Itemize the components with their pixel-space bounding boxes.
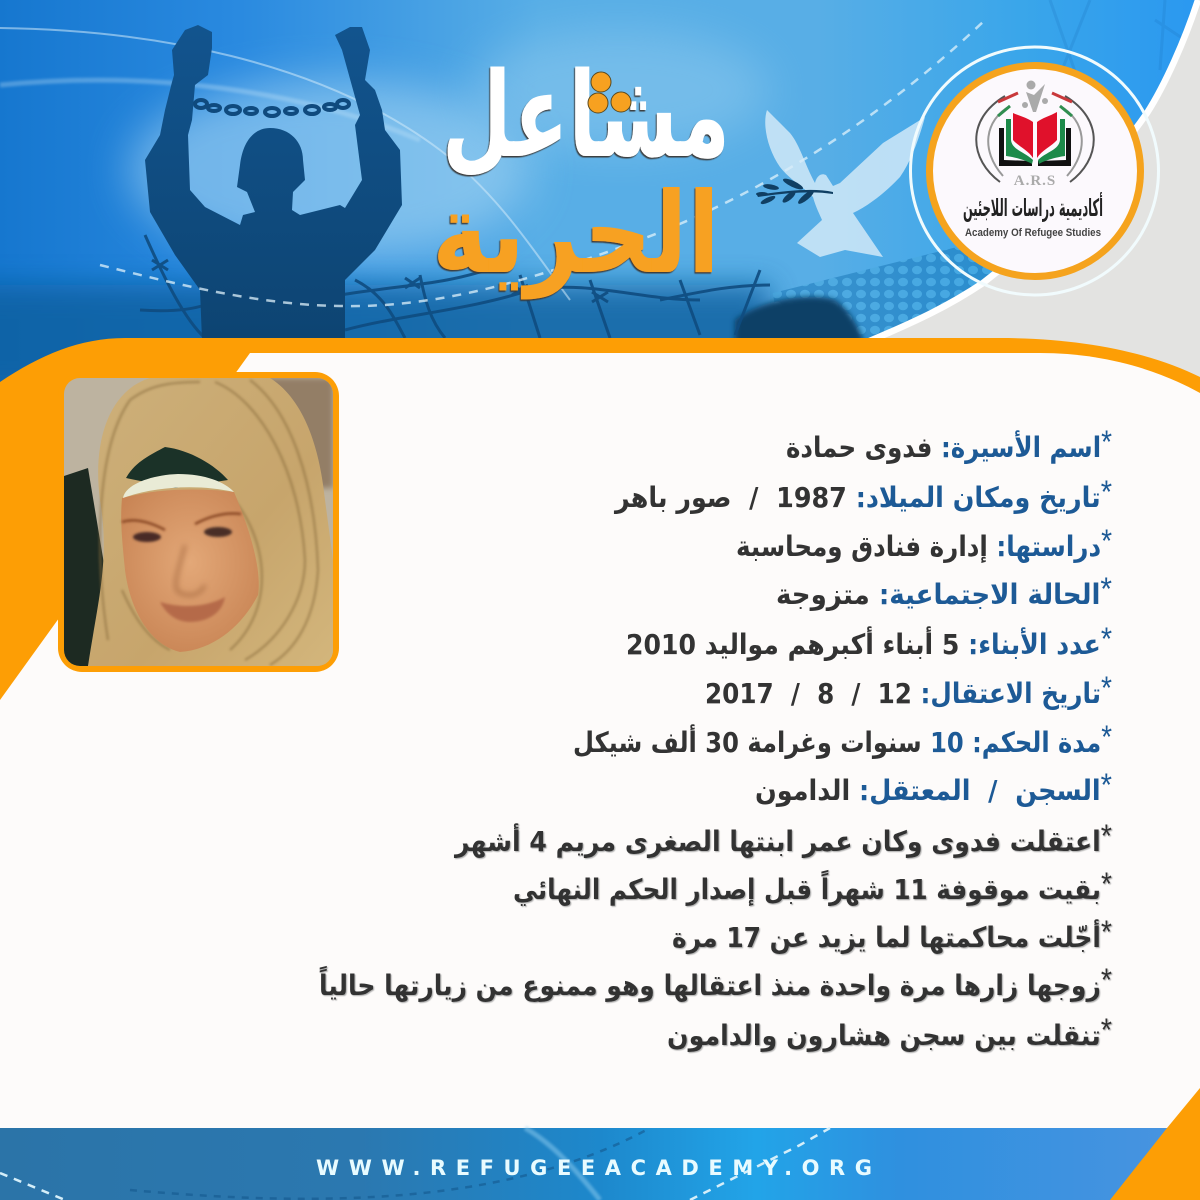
icon: olive branch <box>756 178 833 204</box>
title: مشاعل الحرية <box>432 46 730 299</box>
line: name: * <box>1101 424 1112 460</box>
line: study: دراستها: <box>988 530 1101 563</box>
line: birth: 1987 / صور باهر <box>613 481 847 514</box>
line: study: * <box>1101 523 1112 559</box>
line: status: متزوجة <box>776 578 870 611</box>
line: husband visit: زوجها زارها مرة واحدة منذ اعتقالها وهو ممنوع من زيارتها حالياً <box>319 965 1101 1002</box>
fact list <box>319 424 1112 1052</box>
line: arrested with infant: اعتقلت فدوى وكان عمر ابنتها الصغرى مريم 4 أشهر <box>453 823 1101 858</box>
outer ring <box>910 47 1158 295</box>
line: children: عدد الأبناء: <box>959 627 1101 661</box>
header background <box>0 0 1200 400</box>
line: prison: الدامون <box>755 774 850 807</box>
title word: الحرية: الحرية <box>432 169 720 299</box>
eyes <box>122 513 241 542</box>
lips <box>160 597 225 622</box>
line: detained 11 months: بقيت موقوفة 11 شهراً قبل إصدار الحكم النهائي <box>513 869 1101 907</box>
logo English name: Academy Of Refugee Studies <box>965 227 1101 239</box>
portrait <box>64 378 333 666</box>
footer band <box>0 1128 1200 1200</box>
title word: مشاعل: مشاعل <box>442 46 730 184</box>
line: study: إدارة فنادق ومحاسبة <box>736 530 988 564</box>
line: trial postponed: * <box>1101 914 1112 950</box>
logo book <box>999 112 1071 166</box>
footer url: WWW.REFUGEEACADEMY.ORG <box>316 1156 872 1180</box>
line: status: الحالة الاجتماعية: <box>870 578 1100 611</box>
line: sentence: مدة الحكم: 10 <box>922 726 1101 759</box>
line: prisons: تنقلت بين سجن هشارون والدامون <box>667 1019 1101 1052</box>
line: name: اسم الأسيرة: <box>932 430 1101 464</box>
line: arrested with infant: * <box>1101 818 1112 854</box>
line: name: فدوى حمادة <box>786 431 932 464</box>
orange frame <box>58 372 339 672</box>
title dots <box>588 72 631 113</box>
line: husband visit: * <box>1101 962 1112 998</box>
white band <box>123 474 234 498</box>
line: birth: تاريخ ومكان الميلاد: <box>847 481 1101 514</box>
hijab <box>88 378 333 666</box>
fence mesh <box>774 248 990 338</box>
line: children: * <box>1101 621 1112 657</box>
line: birth: * <box>1101 474 1112 510</box>
hijab folds <box>100 380 318 665</box>
white curve edging the header <box>860 0 1198 345</box>
logo arcs <box>976 93 1094 182</box>
dashed line <box>100 20 985 306</box>
nose <box>176 545 205 595</box>
orange corner triangle <box>1110 1088 1200 1200</box>
logo badge <box>910 47 1158 295</box>
orange swoosh <box>0 338 1200 720</box>
footer background <box>0 1128 1200 1200</box>
line: children: 5 أبناء أكبرهم مواليد 2010 <box>626 626 959 661</box>
line: prison: السجن / المعتقل: <box>850 774 1101 807</box>
icon: dove <box>765 110 925 257</box>
line: detained 11 months: * <box>1101 866 1112 902</box>
line: prisons: * <box>1101 1012 1112 1048</box>
line: arrest date: 12 / 8 / 2017 <box>705 677 912 710</box>
line: arrest date: تاريخ الاعتقال: <box>912 677 1101 710</box>
under scarf <box>126 447 228 488</box>
photo frame <box>58 372 339 672</box>
line: status: * <box>1100 571 1112 607</box>
orange ring <box>930 66 1140 276</box>
line: arrest date: * <box>1101 670 1112 706</box>
logo initials: A.R.S <box>1014 173 1056 189</box>
line: trial postponed: أجّلت محاكمتها لما يزيد عن 17 مرة <box>672 919 1101 954</box>
line: sentence: * <box>1101 719 1112 755</box>
prisoner silhouette <box>145 25 402 340</box>
face <box>121 490 259 652</box>
white content panel <box>0 353 1200 1128</box>
line: sentence: سنوات وغرامة 30 ألف شيكل <box>573 724 922 759</box>
header banner <box>0 0 1200 400</box>
handcuff chain <box>195 100 349 116</box>
barbed wire <box>140 235 770 338</box>
logo figures <box>1022 80 1048 112</box>
line: prison: * <box>1101 767 1112 803</box>
